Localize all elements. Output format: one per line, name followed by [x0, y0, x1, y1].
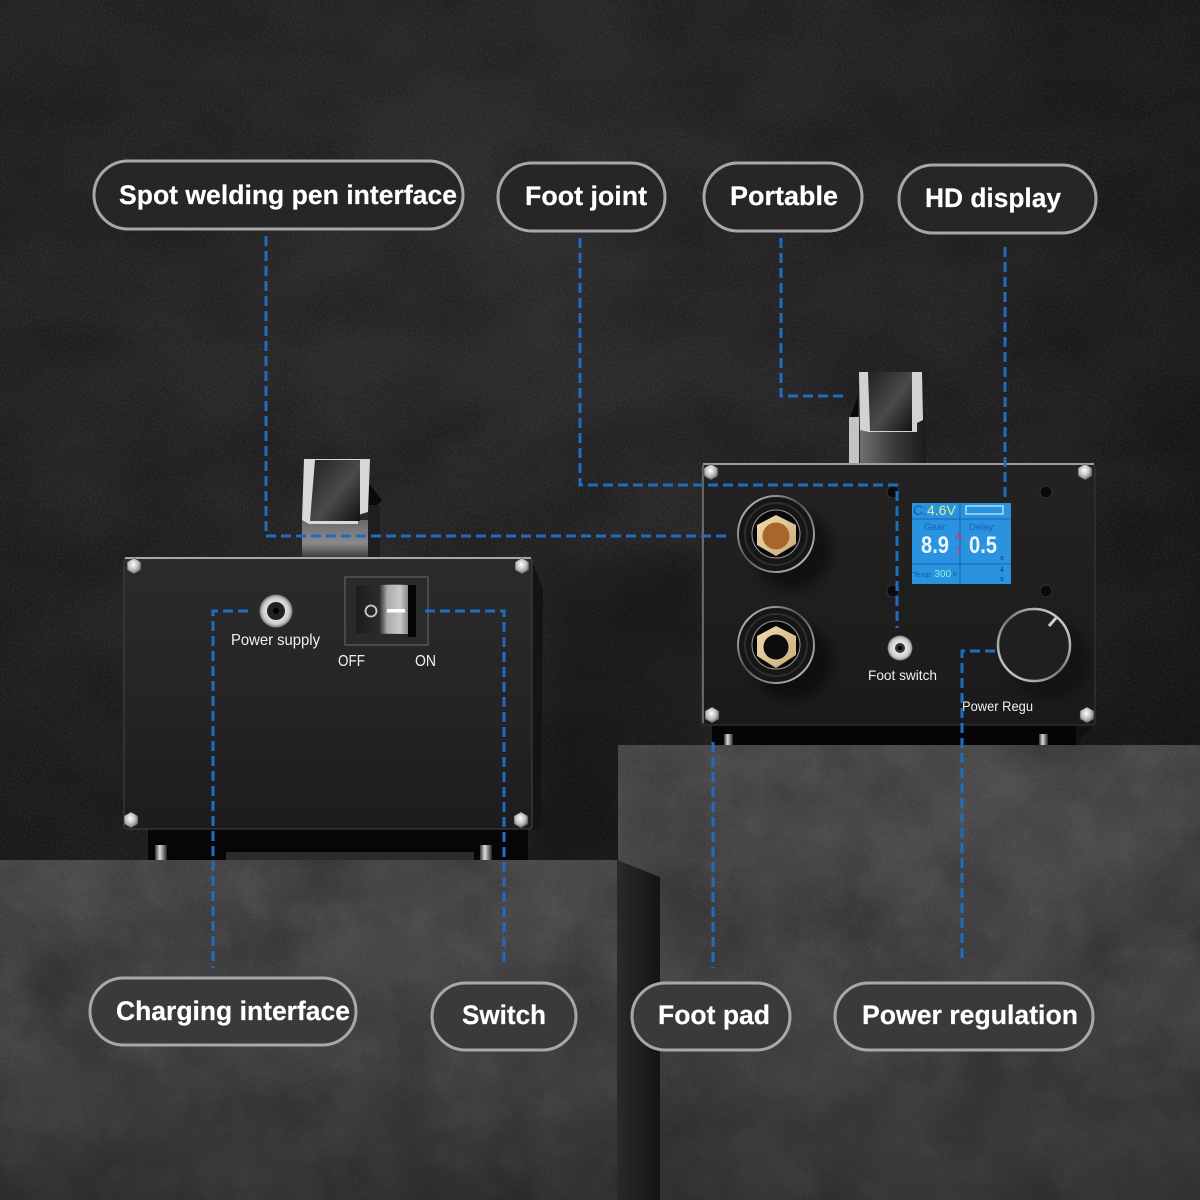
icon: corner bolts right device [704, 464, 1094, 723]
leader line: power regulation [962, 651, 995, 958]
right pen connector [849, 372, 926, 464]
count value: 4 [1000, 567, 1004, 574]
icon: foot switch jack [888, 636, 912, 660]
label: foot pad [632, 983, 790, 1050]
label: portable: Portable [730, 181, 838, 211]
lcd screen [912, 502, 1011, 584]
label: switch: Switch [462, 1000, 546, 1030]
gear label: Gear: [924, 522, 948, 533]
seconds unit: s [1000, 555, 1004, 562]
icon: lower welding socket [738, 607, 832, 701]
label: foot joint [498, 163, 665, 231]
left device feet [148, 826, 528, 860]
label: charging interface [90, 978, 356, 1045]
count unit: s [1000, 576, 1004, 583]
leader line: HD display [1004, 247, 1006, 500]
gear value: 8.9 [921, 532, 949, 559]
leader line: spot welding pen interface [266, 236, 728, 536]
label: spot welding pen interface [94, 161, 463, 229]
label: power regulation: Power regulation [862, 1000, 1078, 1030]
leader line: foot joint [580, 238, 897, 628]
off label: OFF [338, 653, 365, 670]
right device front panel [702, 463, 1095, 725]
label: foot joint: Foot joint [525, 181, 647, 211]
A mode indicator: A [955, 531, 963, 543]
label: charging interface: Charging interface [116, 996, 350, 1026]
right concrete block [618, 745, 1200, 1200]
label: HD display [899, 165, 1096, 233]
delay value: 0.5 [969, 532, 997, 559]
icon: power jack [260, 594, 292, 628]
leader line: switch [425, 611, 504, 962]
T mode indicator: T [956, 546, 963, 558]
label: portable [704, 163, 862, 231]
label: HD display: HD display [925, 183, 1061, 213]
icon: panel screws [887, 486, 1052, 597]
voltage readout: C:4.6V [913, 502, 956, 518]
icon: rocker switch [345, 577, 428, 645]
power regulation device label: Power Regu [962, 698, 1033, 714]
left device side shadow [532, 560, 543, 830]
delay label: Delay: [969, 522, 996, 533]
icon: power knob [998, 609, 1090, 700]
battery bar [966, 506, 1003, 514]
left device front panel [124, 557, 532, 829]
foot switch label: Foot switch [868, 667, 937, 683]
leader line: charging interface [213, 611, 248, 968]
on label: ON [415, 653, 436, 670]
leader line: foot pad [712, 742, 714, 968]
label: spot welding pen interface: Spot welding pen interface [119, 180, 457, 210]
power supply label: Power supply [231, 632, 320, 649]
shadow gap between blocks [617, 860, 660, 1200]
left concrete block [0, 860, 617, 1200]
right device feet [712, 724, 1095, 746]
left pen connector [302, 459, 382, 558]
leader line: portable [781, 238, 848, 396]
icon: upper welding socket [738, 496, 832, 590]
label: foot pad: Foot pad [658, 1000, 770, 1030]
label: power regulation [835, 983, 1093, 1050]
icon: corner bolts left device [124, 558, 529, 828]
label: switch [432, 983, 576, 1050]
temperature readout: Terop: 300 F [913, 569, 957, 580]
